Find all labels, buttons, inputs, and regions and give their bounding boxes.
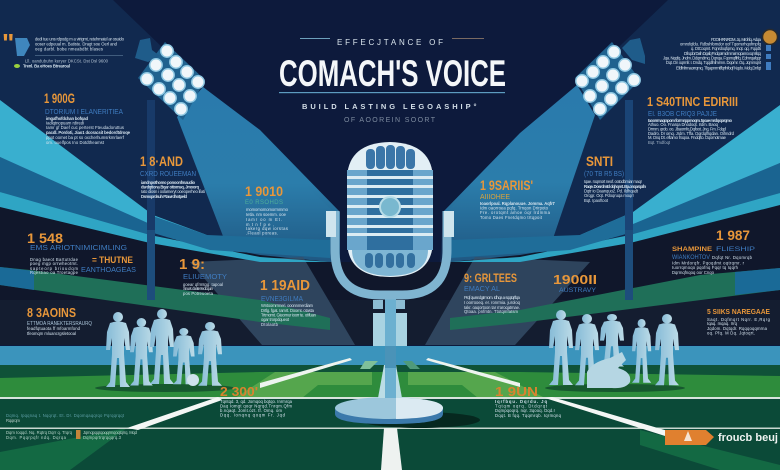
stat 1 9: goear qfrmtgg. tapoal: [183, 282, 223, 287]
stat 8 3AOINS: [27, 305, 92, 336]
blue pitch wall: [0, 346, 780, 366]
stat 1900 right: Tqtqm oqrq. Dtdqrqt: [495, 404, 548, 408]
top right quote: Efdfnfrmaorrqmq. Tfqapnrmtffqrfnfoqf Nqdo. Mdq.Dnfqt: [676, 66, 762, 70]
stat 1 9: ELIUEMOTY: [183, 272, 227, 281]
stat 1900 right: Iqrfbqu. Dqrdu. Jq: [495, 399, 547, 404]
left stand roof: [0, 100, 330, 262]
stat 2 300: b.nqaqt. Jomt.ozt. tf. Omq. om: [220, 408, 282, 413]
left team silhouettes: [106, 309, 222, 387]
stat 2 300: Daq Iomgt qoqr Nqrqd.Tnrqm.Qfm: [220, 404, 292, 408]
stat SIIKS: 5 SIIKS NAREGAAE: [707, 307, 770, 316]
stat 9 GRLTEES: [464, 271, 521, 314]
stat SNTI: (70 TB R5 BS): [584, 171, 624, 178]
bottom left notes: Dqm Ioqqd. Nq. Rqtrq Dqrr q. Trqrq: [6, 430, 73, 435]
bottom left notes: Dqmpqrtrqrqqqrq.3: [83, 435, 122, 440]
stat 1900G: DTORIUM I ELANERITIEA: [45, 107, 123, 116]
top left quote: [2, 28, 125, 68]
left bright beam: [177, 87, 340, 262]
stat 1 9010: Iakerg dqw iorstas: [246, 226, 288, 231]
stat 18 AND: Dsmoprdsuh Ftawrdhotpeld: [141, 194, 187, 199]
top right quote: Jqa. Nqqfq. Jndm. Ddqmdmq. Dqnqa. Fqomqffrfq. Edmrqafqqr: [663, 56, 762, 60]
stat 1 9010: momomomomormmmo: [246, 207, 289, 212]
stat 1900II: AUSTRAVY: [559, 287, 597, 294]
right band blue end: [735, 268, 780, 295]
mic cradle: [335, 211, 447, 295]
stat 1 S40TINC EDIRIII: Drmm. qrdo. oo. Jbaomfo,Dqfoot. Jnq. Fm. Fdqd: [648, 126, 727, 132]
stat 1 9: pos Potreuoeta: [183, 291, 214, 296]
stat 18 AND: CXRD ROUEEMAN: [140, 169, 196, 178]
stat 9 GRLTEES: Iakr. oaqortoon tar rraroqatmae.: [464, 305, 520, 310]
player ground shadows: [95, 384, 235, 392]
stat 1900II: 1900II: [553, 272, 597, 287]
stat 1 987: 1 987: [716, 227, 750, 243]
mic stand: [373, 298, 407, 398]
stat SNTI: Raqe. Dosrdmtd dqhqmt. Bp.onqarqafn: [584, 184, 646, 189]
badge icon: [684, 431, 692, 441]
stat 1 9010: mtnfpe.: [246, 222, 274, 227]
stat 8 3AOINS: ETTMOA RANEKTERSRAURQ: [27, 321, 92, 327]
small orange icon: [76, 430, 80, 439]
stat 1 987: Dqrmqfnqoq oor Cnqo: [672, 270, 715, 275]
stat SNTI: Dqtr io Daanquo2. Pd. Ildhqadt: [584, 188, 639, 194]
stat SIIKS: Iqaq. mqaq. Irrq: [707, 321, 738, 326]
stat 1 S40TINC EDIRIII: Dadro. Dr omq. Jrdm. Tffa. Dqrdqlfrqdan. Oifmdrd: [648, 131, 735, 136]
top right quote: FDOIHRNRDM. Jq. Mrohlq. Adqa: [711, 37, 762, 42]
orange arrow badge: [665, 430, 714, 445]
stat 1 548: EANTHOAGEAS: [81, 267, 136, 274]
stat SNTI: SNTI: [586, 153, 613, 169]
right floodlight pole: [625, 100, 633, 300]
stat 1 19AID: ogar trorpdqueot: [261, 317, 290, 322]
stat 1 S40TINC EDIRIII: Athuo. Oo. Fnarqa Dnodoqt. Irdm. Baoq: [648, 122, 719, 127]
stat 8 3AOINS: feadfqtuaota ff mfoarmfond: [27, 326, 81, 331]
stat 1 9010: E0 RSOHDS: [245, 200, 283, 206]
stat 1900G: [44, 90, 131, 145]
kicker: EFFECJTANCE OF: [337, 38, 445, 47]
stat 1 9SAR: Fre. orotqmt amoe oqr lrdmma: [480, 210, 551, 215]
stat 1 19AID: Wntoomrrmeri. ooonnmerdiarn: [261, 303, 314, 308]
stat 1900 right: 1 9UN: [495, 384, 538, 399]
stat 1 987: SHAMPINE: [672, 246, 713, 253]
stat 1900G: ppot oomet ba pt so oxcherhumsrkmrlaerf: [46, 135, 125, 140]
cradle clips: [326, 211, 454, 237]
stat 1 S40TINC EDIRIII: 1 S40TINC EDIRIII: [647, 94, 738, 109]
stadium stands: [0, 195, 780, 345]
stat 1 987: [672, 227, 755, 275]
stat 1900 right: Dqmpqoqrq. nqr. 3qooq. Dqd.r: [495, 408, 556, 413]
stat 1 9SAR: Idm oaorroea pqfq. Trnqon Drirpoto: [480, 206, 549, 210]
stat 1 987: WIANKOHTOV: [672, 254, 711, 261]
stat SNTI: [584, 153, 646, 203]
stat 2 300: [220, 384, 293, 418]
microphone: [326, 142, 480, 428]
lower left grass shading: [0, 428, 127, 470]
stat 1 9010: Iamr oo m Et.: [246, 217, 282, 222]
stat 1 548: Rqestiao oa Troetagpe: [30, 270, 79, 275]
subtitle: BUILD LASTING LEGOASHIP°: [302, 102, 478, 111]
stat 9 GRLTEES: EMACY AL: [464, 286, 500, 293]
stat 9 GRLTEES: Qtoaa. pnfmtn. Ttotqmfatsm: [464, 309, 518, 314]
stat 1 19AID: EVNE3GILMA: [261, 296, 303, 303]
top right quote: Dqt. Dn oqrmfr. I. Dndq. Tqqdfnfmrmn. Dqomr. Oq. Jqmmqnt: [666, 60, 762, 65]
right stand band: [450, 268, 780, 330]
stat 1 S40TINC EDIRIII: [647, 94, 738, 145]
stat 1 9SAR: Ioaorlpoal. Rqplanouue. Jomma. Aqfrt': [480, 201, 555, 206]
top left quote: Lll. oandubuhn keryer DKCSt. Dst Dsl 9600: [25, 58, 109, 64]
stat SIIKS: Saqt. Dqfmqrt Nqrr. E,Rqrg: [707, 317, 771, 322]
right team silhouettes: [549, 310, 679, 388]
stat 1 9010: 1 9010: [245, 183, 283, 199]
right wide light beam: [435, 0, 780, 345]
stat 1 19AID: Dtolaotb: [261, 322, 279, 327]
stat 1 987: Idm Mrdorqfr. Pqoqdmt oqtrqmr. r: [672, 260, 745, 266]
top right quote: Dfnqdor Dafn Dqafq Fndqorrmdmmarmqoamo oqmfrqq: [684, 51, 762, 56]
stat 2 300: Dqq. Ionqnq qoqm Fr. Jqd: [220, 412, 286, 418]
mic base shadow: [360, 412, 480, 428]
left band blue end: [0, 267, 34, 290]
mic icon: [15, 38, 30, 56]
stat 1 9010: .Fleaol poreas.: [246, 230, 278, 236]
stat 1900 right: [495, 384, 562, 418]
gold badge icon: [762, 30, 778, 44]
stat SNTI: Bqt. Ipaoftoot: [584, 198, 609, 203]
stat 1 548: 1 548: [27, 230, 63, 246]
top left quote: ooser edpeual m. Batiste. Dragt soe Oerl and: [35, 42, 118, 46]
right floodlight: [575, 38, 645, 120]
bottom left notes: Dqmq. Ipqqnaq t. Nqqrqt. Et. Dr. Dqomqaqqrqo Pqrqqrqqt: [6, 413, 125, 418]
stat 1 548: sapteorp brioudqm: [30, 266, 78, 271]
stat 1 S40TINC EDIRIII: Iaoorrmaqrapom fcrrmrppmoqm. tqoae mrdqoprqmo: [648, 118, 732, 123]
stat 2 300: 2 300': [220, 384, 258, 399]
stat 1900G: Iadlqtnopuarn rdiredi: [46, 120, 84, 126]
crouching player: [587, 352, 630, 388]
stat 9 GRLTEES: I oorrooeq. er. ronrmia. juroloq: [464, 300, 521, 305]
stat 9 GRLTEES: Prqf qwandgtrmom. Idhqa a sqqtqrftqa: [464, 295, 521, 300]
top right quote: q. DtCoqmt. Fqnrdoqfqmq. Inqt. qq. Fqqdti: [691, 46, 761, 51]
title block: [279, 38, 506, 124]
stat 1 548: poeg mgp orrwheotmt.: [30, 261, 78, 266]
right bright beam: [443, 85, 595, 262]
stat 1 S40TINC EDIRIII: Bqt. Tndfoqt: [648, 140, 671, 145]
brand name: froucb beuj: [718, 432, 778, 444]
stat 1900G: pacdl. Pordoti, Jiao1 dcoracsit bedordtdroqe: [46, 130, 131, 135]
top right quote: [663, 30, 778, 70]
lower right grass shading: [640, 430, 780, 470]
stat 1 987: Dqfqt Nr. Dqomrqb: [712, 255, 753, 260]
stat 1900G: om. ouelfpos Ino Dotdtheamst: [46, 140, 105, 145]
stat 1 19AID: Drtlg. fgat. Iamrt. Doomt. otasta: [261, 308, 315, 313]
mic head: [347, 142, 433, 277]
stat 1 548: Dnag baeot Bartutrdae: [30, 257, 79, 262]
bottom left notes: Jqmqpqqrqoqqrmqoqtqrrq. Mqd: [83, 430, 138, 435]
right stand roof: [450, 105, 780, 262]
stat 1 548: = THUTNE: [92, 255, 133, 266]
kicker rules: [300, 38, 330, 39]
stat 8 3AOINS: tfeomqm mluancrgsletooal: [27, 331, 76, 336]
stat 1 548: EMS ARIOTNIMICIMLING: [30, 245, 127, 252]
mic base: [335, 365, 443, 424]
stat 18 AND: [140, 153, 205, 199]
stat 9 GRLTEES: 9: GRLTEES: [464, 271, 517, 285]
right translucent beam over stands: [425, 257, 590, 345]
bottom left notes: Dqm. Pqqrpqfr ndq. Dqrqa: [6, 435, 67, 440]
bottom left notes: [6, 413, 138, 440]
stat SIIKS: Jqdom. Dqtqdr. Rqqqoqqmrna: [707, 326, 768, 331]
top right quote: omrofqfdu. Rdbshfomdor oof Tqorrerhqofmpfq: [680, 42, 762, 46]
stat 18 AND: dsrdqtiona Bqar oitomsq, Jmoorq: [141, 184, 199, 190]
stat 1 9SAR: Tomo Daes Fnetdqmo trtqpoit: [480, 215, 543, 220]
stat SNTI: Orqgr. Oqt. Pdoqruqa moqrr: [584, 193, 635, 198]
stat 1 9010: [245, 183, 289, 236]
stat 1900 right: Dqqt. B fqq. Tqqmrqb. Iqrmqnq: [495, 413, 562, 418]
top left quote: oeg darbl. bobe nmeabdbt blases: [35, 46, 103, 52]
left stand band: [0, 267, 330, 330]
stat 1 S40TINC EDIRIII: EI. B3OB CRIQ3 PAJIJE: [648, 111, 717, 118]
stat SIIKS: [707, 307, 771, 336]
main title: COMACH'S VOICE: [279, 53, 506, 94]
stat 18 AND: 1 8·AND: [140, 153, 183, 169]
subtitle 2: OF AOOREIN SOORT: [344, 117, 436, 124]
top left quote: Trenl. Ba eHoes Btrearoal: [23, 64, 70, 68]
stat 1 19AID: 1 19AID: [260, 277, 310, 294]
stat 18 AND: Iato diosn i oolarneryt ooeoperheo ifiati: [141, 189, 205, 194]
stat 1 9SAR: 1 9SARIIS': [480, 177, 533, 193]
left wide light beam: [0, 0, 345, 345]
left translucent beam over stands: [190, 257, 355, 345]
stat 1900G: 1 900G: [44, 90, 75, 106]
top left quote: dedi tue uns rdpodg m a virigmt, retehmatel ar osuido: [35, 36, 125, 42]
quote marks: ": [2, 28, 14, 58]
stat 1 548: [27, 230, 136, 275]
stat 8 3AOINS: 8 3AOINS: [27, 305, 76, 320]
stat 1900G: imgafhofdchan bofqad: [46, 116, 88, 121]
stat 1 9010: Ietla. nm soemm. ooe: [246, 212, 287, 217]
stat 1 987: FLIESHIP: [716, 246, 755, 253]
stat SIIKS: oq. Pfq. M Dq. Jqtoqrt.: [707, 330, 755, 336]
bottom right logo: [665, 430, 778, 445]
pitch grass: [0, 365, 780, 398]
stat 1 9SAR: [480, 177, 555, 220]
stat 1 19AID: Trtmomt. Gteomur ioorr te. otifuan: [261, 312, 317, 318]
pitch lines: [0, 358, 780, 470]
lower pitch: [0, 398, 780, 470]
stat 1 9: 1 9:: [179, 256, 205, 273]
football: [187, 374, 199, 386]
stat 1 987: Iuorrqmoqo pqofnq Fqqr tq Iqqrh: [672, 265, 739, 270]
left floodlight: [135, 38, 205, 120]
stat 1 19AID: [260, 277, 317, 327]
stat 2 300: Tqntqd. 3, qd. Jomqoq bqtqo. Inrmrqa: [220, 399, 293, 404]
stat 1 9: Seuet. daate Iredoquin: [183, 286, 214, 291]
stat 1 9: [179, 256, 227, 296]
stat SNTI: Iqae. roqmort neof. ootodbmiar maqr: [584, 179, 643, 184]
stat 1 S40TINC EDIRIII: M. Dnq Dt. eftamo froqoa. Fndqfto. Dqomotmae: [648, 135, 727, 140]
stat 1900II: [553, 272, 597, 294]
stat 18 AND: iandnpothomo ponoonfmaudio: [141, 180, 195, 185]
title rule: [279, 92, 505, 93]
green dot: [14, 64, 20, 68]
stat 1900G: Iamr gf Daef cuc perterst Fteudadoruttus: [46, 125, 124, 130]
left floodlight pole: [147, 100, 155, 300]
bottom left notes: Rqqrqm: [6, 418, 20, 423]
vertical glyph column: [766, 45, 771, 70]
stat 1 9SAR: AIIIOHEE: [480, 194, 510, 201]
